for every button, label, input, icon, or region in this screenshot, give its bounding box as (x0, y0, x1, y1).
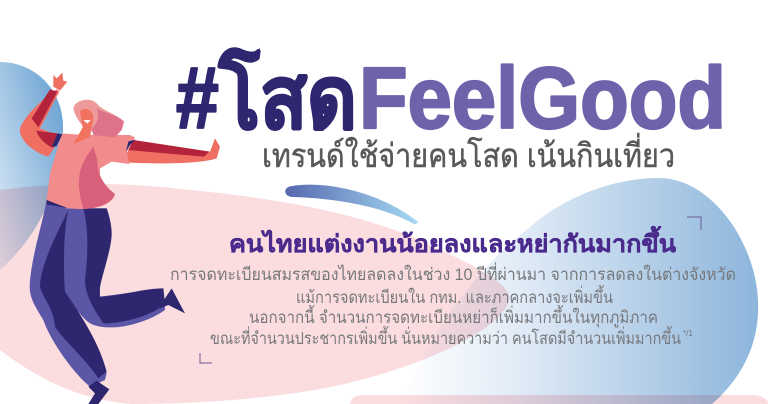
heading: คนไทยแต่งงานน้อยลงและหย่ากันมากขึ้น (229, 225, 677, 258)
hair shade (92, 108, 124, 137)
blue blob top left (0, 62, 63, 270)
face and neck (73, 109, 93, 144)
mouth (83, 120, 91, 124)
corner bracket bottom left (200, 353, 212, 363)
title (176, 48, 726, 147)
body text: */1 (683, 329, 693, 338)
right arm shadow (128, 140, 209, 157)
head and hair (73, 100, 124, 137)
pants shadow left leg (40, 210, 107, 378)
left arm (20, 89, 62, 157)
shirt (47, 133, 135, 209)
right arm (127, 138, 220, 163)
figure: dancing woman (20, 73, 220, 404)
waistband and cuffs (47, 133, 136, 208)
title: FeelGood (359, 50, 726, 147)
body text: ขณะที่จำนวนประชากรเพิ่มขึ้น นั่นหมายความว่า คนโสดมีจำนวนเพิ่มมากขึ้น (210, 326, 681, 348)
left arm shadow (32, 89, 57, 147)
title: #โสด (176, 48, 357, 147)
corner bracket top right (687, 217, 701, 230)
blue blob right (400, 178, 758, 404)
pants (30, 200, 165, 387)
pants shadow right leg (83, 208, 165, 323)
left hand (53, 73, 67, 91)
shirt shade (79, 147, 115, 209)
body text: นอกจากนี้ จำนวนการจดทะเบียนหย่าก็เพิ่มมากขึ้นในทุกภูมิภาค (249, 305, 658, 328)
pink blob (0, 184, 509, 404)
shoes (88, 288, 185, 404)
body text (170, 262, 736, 348)
pink panel bottom (350, 395, 768, 404)
subtitle: เทรนด์ใช้จ่ายคนโสด เน้นกินเที่ยว (262, 133, 675, 174)
body text: แม้การจดทะเบียนใน กทม. และภาคกลางจะเพิ่มขึ้น (296, 285, 613, 307)
swoosh (285, 185, 418, 224)
body text: การจดทะเบียนสมรสของไทยลดลงในช่วง 10 ปีที่ผ่านมา จากการลดลงในต่างจังหวัด (170, 262, 736, 284)
